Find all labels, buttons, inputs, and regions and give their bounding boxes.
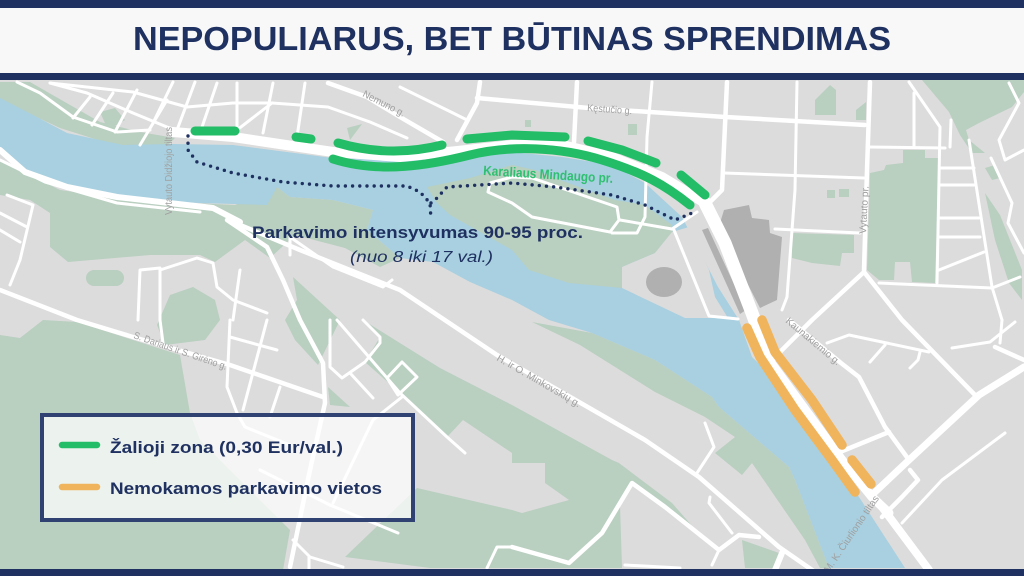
land between channel and river [622,227,728,318]
free parking segments [747,320,871,492]
street labels: Kaunakiemio g. [783,316,842,368]
legend [42,415,413,520]
legend swatch: free parking [62,484,97,490]
legend label: free parking: Nemokamos parkavimo vietos [110,479,382,498]
road label: Karaliaus Mindaugo pr.: Karaliaus Mindaugo pr. [483,163,613,186]
header band [0,0,1024,80]
title: NEPOPULIARUS, BET BŪTINAS SPRENDIMAS [133,20,891,57]
annotation: parking intensity [252,223,583,266]
annotation: parking intensity: (nuo 8 iki 17 val.) [350,249,493,266]
street labels [132,89,882,575]
stadium and buildings [646,205,782,314]
parking zones [188,131,871,492]
street labels: H. ir O. Minkovskių g. [494,353,582,410]
street labels: Kęstučio g. [587,103,632,117]
peninsula over river [427,165,673,288]
annotation: parking intensity: Parkavimo intensyvumas 90-95 proc. [252,223,583,242]
legend swatch: green zone [62,442,97,448]
street labels: Vytauto Didžiojo tiltas [164,127,175,215]
river [0,98,905,568]
bottom bar [0,569,1024,576]
legend label: green zone: Žalioji zona (0,30 Eur/val.) [110,438,343,457]
street labels: S. Dariaus ir S. Girėno g. [132,330,228,373]
street labels: M. K. Čiurlionio tiltas [821,493,882,575]
street labels: Vytauto pr. [858,186,872,234]
green zone segments [195,131,705,205]
street labels: Nemuno g. [361,89,407,120]
dotted intensity bracket [188,136,697,220]
